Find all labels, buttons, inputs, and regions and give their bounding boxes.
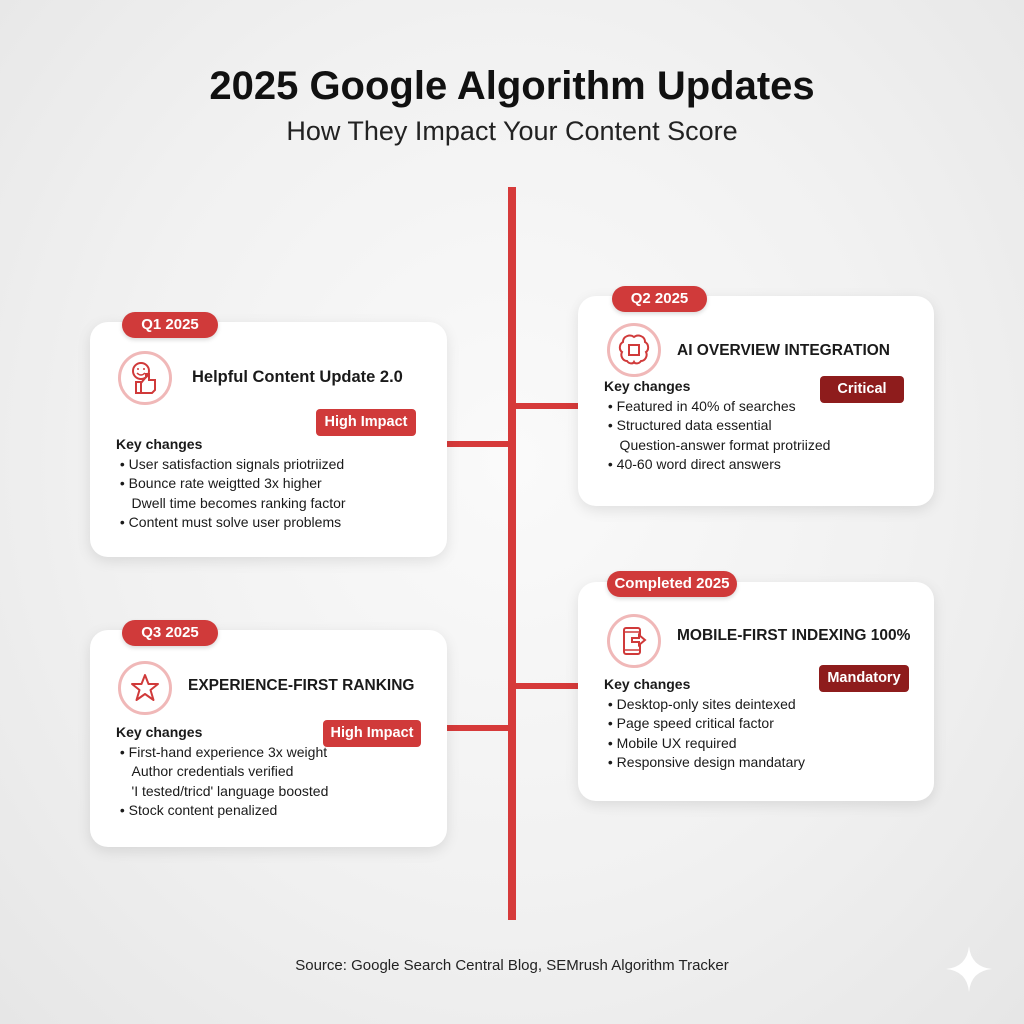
badge: Q2 2025	[612, 286, 707, 312]
connector q3	[447, 725, 512, 731]
badge: Q1 2025: Q1 2025	[141, 316, 199, 333]
key changes: • Content must solve user problems	[120, 514, 341, 530]
heading: EXPERIENCE-FIRST RANKING	[188, 677, 414, 694]
tag: high impact	[316, 409, 416, 436]
key changes: • 40-60 word direct answers	[608, 456, 781, 472]
badge: Q3 2025: Q3 2025	[141, 624, 199, 641]
tag: critical: Critical	[837, 381, 887, 397]
icon: star	[118, 661, 172, 715]
panel: completed	[578, 582, 934, 801]
key changes: Key changes	[604, 378, 690, 394]
panel: Q3	[90, 630, 447, 847]
panel: Q1	[90, 322, 447, 557]
key changes	[604, 676, 805, 770]
connector completed	[512, 683, 578, 689]
tag: high impact	[323, 720, 421, 747]
key changes: 'I tested/tricd' language boosted	[132, 782, 328, 798]
key changes: • Featured in 40% of searches	[608, 398, 796, 414]
key changes: Dwell time becomes ranking factor	[132, 494, 346, 510]
badge: Q3 2025	[122, 620, 218, 646]
key changes: • Stock content penalized	[120, 802, 277, 818]
key changes: Key changes	[604, 676, 690, 692]
icon: brain chip	[607, 323, 661, 377]
icon: smiley thumbs up	[118, 351, 172, 405]
key changes: • Responsive design mandatary	[608, 754, 805, 770]
key changes: • First-hand experience 3x weight	[120, 744, 327, 760]
timeline	[508, 187, 516, 920]
key changes	[116, 436, 346, 530]
heading: Helpful Content Update 2.0	[192, 368, 403, 386]
subtitle: How They Impact Your Content Score	[286, 116, 738, 146]
key changes: • Page speed critical factor	[608, 715, 774, 731]
tag: high impact: High Impact	[330, 725, 413, 741]
key changes: Key changes	[116, 724, 202, 740]
key changes: • Mobile UX required	[608, 734, 737, 750]
key changes: Question-answer format protriized	[620, 436, 830, 452]
icon: mobile	[607, 614, 661, 668]
tag: mandatory	[819, 665, 909, 692]
key changes	[116, 724, 328, 818]
badge: Q1 2025	[122, 312, 218, 338]
heading: MOBILE-FIRST INDEXING 100%	[677, 627, 910, 644]
key changes: • Structured data essential	[608, 417, 772, 433]
key changes	[604, 378, 830, 472]
key changes: Author credentials verified	[132, 763, 293, 779]
connector q2	[512, 403, 578, 409]
key changes: • Desktop-only sites deintexed	[608, 696, 796, 712]
connector q1	[447, 441, 512, 447]
tag: high impact: High Impact	[324, 414, 407, 430]
key changes: Key changes	[116, 436, 202, 452]
key changes: • User satisfaction signals priotriized	[120, 456, 344, 472]
tag: critical	[820, 376, 904, 403]
key changes: • Bounce rate weigtted 3x higher	[120, 475, 322, 491]
badge: completed 2025	[607, 571, 737, 597]
badge: completed 2025: Completed 2025	[614, 575, 730, 592]
panel: Q2	[578, 296, 934, 506]
tag: mandatory: Mandatory	[827, 670, 901, 686]
icon: sparkle	[947, 947, 991, 991]
title: 2025 Google Algorithm Updates	[209, 64, 815, 108]
source: Source: Google Search Central Blog, SEMrush Algorithm Tracker	[295, 957, 729, 974]
badge: Q2 2025: Q2 2025	[631, 290, 688, 307]
heading: AI OVERVIEW INTEGRATION	[677, 342, 890, 359]
